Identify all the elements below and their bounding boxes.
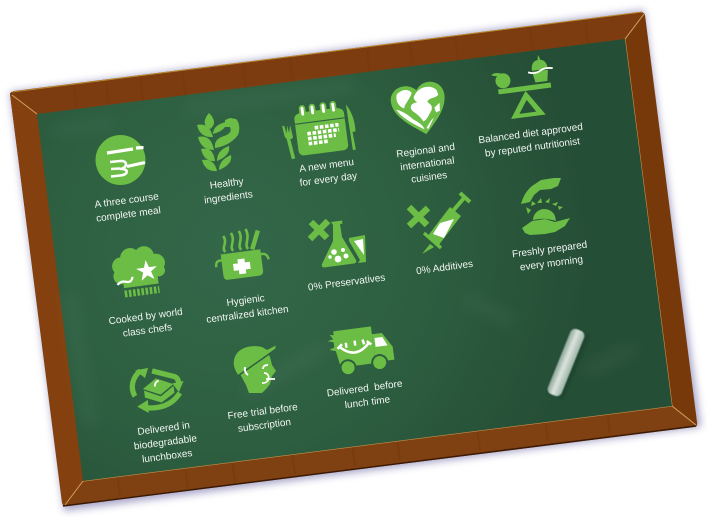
wood grain — [74, 20, 610, 496]
green board surface — [37, 39, 672, 481]
icon: calendar with fork and knife — [280, 102, 358, 160]
item: zero additives — [409, 193, 474, 277]
label: a three course complete meal: A three course — [94, 191, 159, 211]
label: 0% additives: 0% Additives — [416, 259, 474, 277]
label: regional and international cuisines: Regional and — [396, 142, 456, 160]
label: hygienic centralized kitchen: Hygienic — [226, 293, 265, 309]
label: delivered before lunch time: lunch time — [344, 394, 391, 411]
icon: speeding delivery truck — [326, 324, 396, 378]
frame: right side — [625, 13, 697, 426]
icon: cross and syringe — [409, 193, 470, 254]
item: balanced diet — [478, 53, 585, 160]
label: freshly prepared every morning: every morning — [519, 254, 584, 273]
label: a new menu for every day: A new menu — [299, 157, 355, 175]
item: cooked by world class chefs — [108, 244, 185, 341]
icon: recycle arrows and box — [130, 363, 187, 415]
label: a new menu for every day: for every day — [299, 171, 358, 189]
label: balanced diet approved by reputed nutritionist: by reputed nutritionist — [484, 136, 581, 160]
icon: chef hat with star — [110, 244, 168, 295]
icon: balance scale with apple and cupcake — [489, 53, 559, 121]
item: free trial — [227, 346, 301, 436]
label: healthy ingredients: ingredients — [204, 189, 253, 207]
label: delivered in biodegradable lunchboxes: lunchboxes — [142, 448, 193, 466]
chalk smudges — [55, 86, 630, 420]
icon: head with cap — [234, 346, 276, 393]
item: new menu every day — [280, 102, 358, 189]
frame: bottom side — [63, 406, 697, 506]
label: free trial before subscription: Free trial before — [227, 402, 298, 422]
icon: wheat with bicep — [197, 113, 239, 171]
label: cooked by world class chefs: class chefs — [122, 322, 173, 340]
item: hygienic centralized kitchen — [204, 227, 289, 326]
label: 0% preservatives: 0% Preservatives — [307, 272, 386, 294]
icon: heart globe — [389, 80, 450, 139]
label: regional and international cuisines: cuisines — [411, 170, 448, 186]
item: biodegradable lunchboxes — [130, 363, 200, 466]
icon: hands with sun — [521, 178, 570, 235]
label: delivered in biodegradable lunchboxes: Delivered in — [137, 420, 191, 438]
label: hygienic centralized kitchen: centralized kitchen — [206, 304, 289, 326]
label: delivered in biodegradable lunchboxes: biodegradable — [133, 433, 198, 452]
label: regional and international cuisines: international — [400, 155, 455, 173]
icon: plate and cutlery — [96, 135, 146, 185]
label: freshly prepared every morning: Freshly prepared — [511, 240, 588, 260]
icon: steaming pot with cross — [212, 227, 271, 281]
item: freshly prepared — [511, 178, 590, 274]
item: three course meal — [94, 135, 162, 225]
frame: left side — [10, 94, 83, 506]
label: balanced diet approved by reputed nutritionist: Balanced diet approved — [478, 122, 583, 146]
item: healthy ingredients — [197, 113, 253, 207]
label: a three course complete meal: complete meal — [96, 205, 161, 225]
label: cooked by world class chefs: Cooked by world — [108, 307, 183, 327]
icon: cross and flask — [310, 220, 366, 268]
label: free trial before subscription: subscription — [237, 417, 292, 435]
label: delivered before lunch time: Delivered before — [326, 379, 403, 399]
item: delivered before lunch time — [326, 324, 405, 413]
frame highlights — [12, 12, 642, 92]
chalk stick — [546, 327, 590, 399]
item: zero preservatives — [307, 220, 386, 294]
item: regional and international cuisines — [389, 80, 459, 187]
label: healthy ingredients: Healthy — [209, 176, 244, 192]
frame: top side — [12, 13, 642, 114]
